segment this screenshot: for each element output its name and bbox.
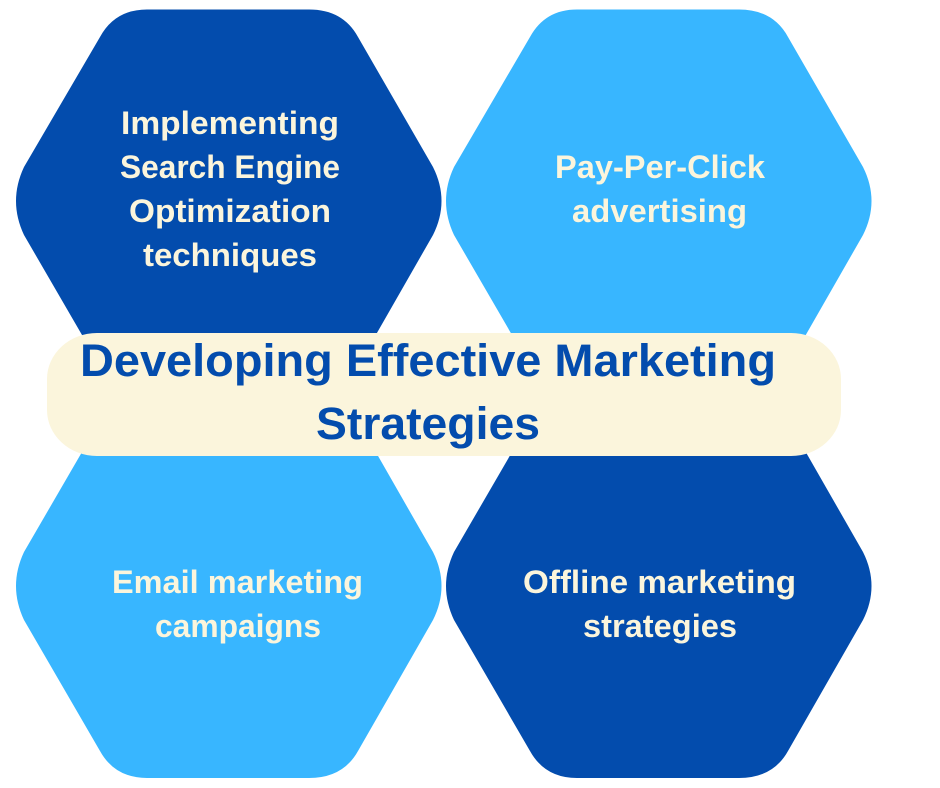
hexagon: email marketing [16,394,442,778]
label: pay-per-click: advertising [572,193,747,229]
label: offline marketing [523,564,796,644]
label: search engine optimization: Search Engine [120,149,340,185]
title: Developing Effective Marketing [80,335,776,386]
label: email marketing [112,564,363,644]
label: offline marketing: strategies [583,608,737,644]
label: pay-per-click: Pay-Per-Click [555,149,765,185]
hexagon: offline marketing [446,394,872,778]
label: email marketing: campaigns [155,608,321,644]
label: email marketing: Email marketing [112,564,363,600]
central banner [47,333,841,456]
label: offline marketing: Offline marketing [523,564,796,600]
label: pay-per-click [555,149,765,229]
hexagon: search engine optimization [16,10,442,393]
label: search engine optimization: Implementing [121,105,339,141]
hexagon: pay-per-click [446,10,872,393]
label: search engine optimization: techniques [143,237,317,273]
title [80,335,776,449]
label: search engine optimization [120,105,340,273]
label: search engine optimization: Optimization [129,193,331,229]
title: Strategies [316,398,540,449]
